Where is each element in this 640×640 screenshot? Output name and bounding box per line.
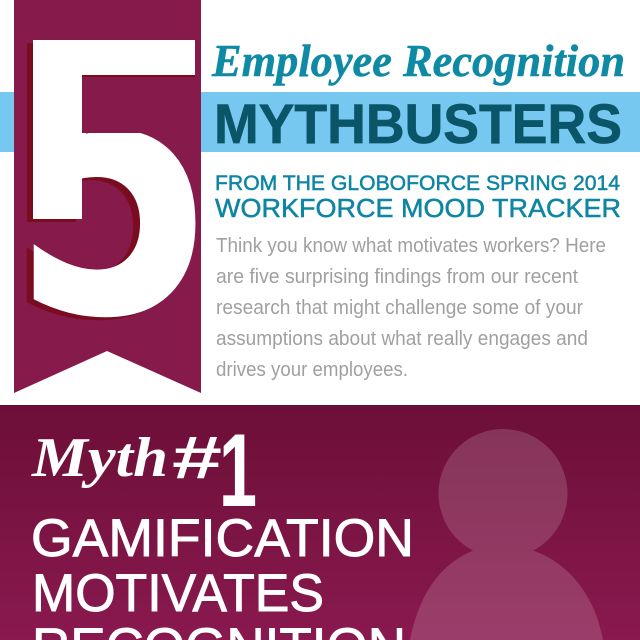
blue title band bbox=[0, 92, 640, 152]
intro paragraph: assumptions about what really engages and bbox=[216, 328, 588, 350]
myth heading bbox=[31, 413, 257, 529]
myth statement: GAMIFICATION bbox=[31, 509, 414, 568]
myth statement: MOTIVATES bbox=[32, 564, 324, 623]
icon: person silhouette bbox=[410, 429, 603, 640]
script heading: Employee Recognition bbox=[211, 35, 625, 86]
myth statement bbox=[31, 509, 414, 640]
title: MYTHBUSTERS bbox=[214, 92, 622, 155]
intro paragraph bbox=[216, 235, 606, 381]
intro paragraph: Think you know what motivates workers? Here bbox=[216, 235, 606, 257]
subtitle bbox=[215, 172, 621, 223]
intro paragraph: research that might challenge some of your bbox=[216, 297, 583, 319]
panel: myth 1 bbox=[0, 405, 640, 640]
myth heading: Myth bbox=[31, 427, 168, 489]
myth heading: # bbox=[172, 424, 222, 491]
ribbon banner bbox=[4, 0, 216, 404]
intro paragraph: drives your employees. bbox=[216, 359, 408, 381]
subtitle: FROM THE GLOBOFORCE SPRING 2014 bbox=[215, 172, 620, 195]
myth heading: 1 bbox=[219, 413, 257, 529]
intro paragraph: are five surprising findings from our recent bbox=[216, 266, 578, 288]
subtitle: WORKFORCE MOOD TRACKER bbox=[215, 193, 621, 223]
